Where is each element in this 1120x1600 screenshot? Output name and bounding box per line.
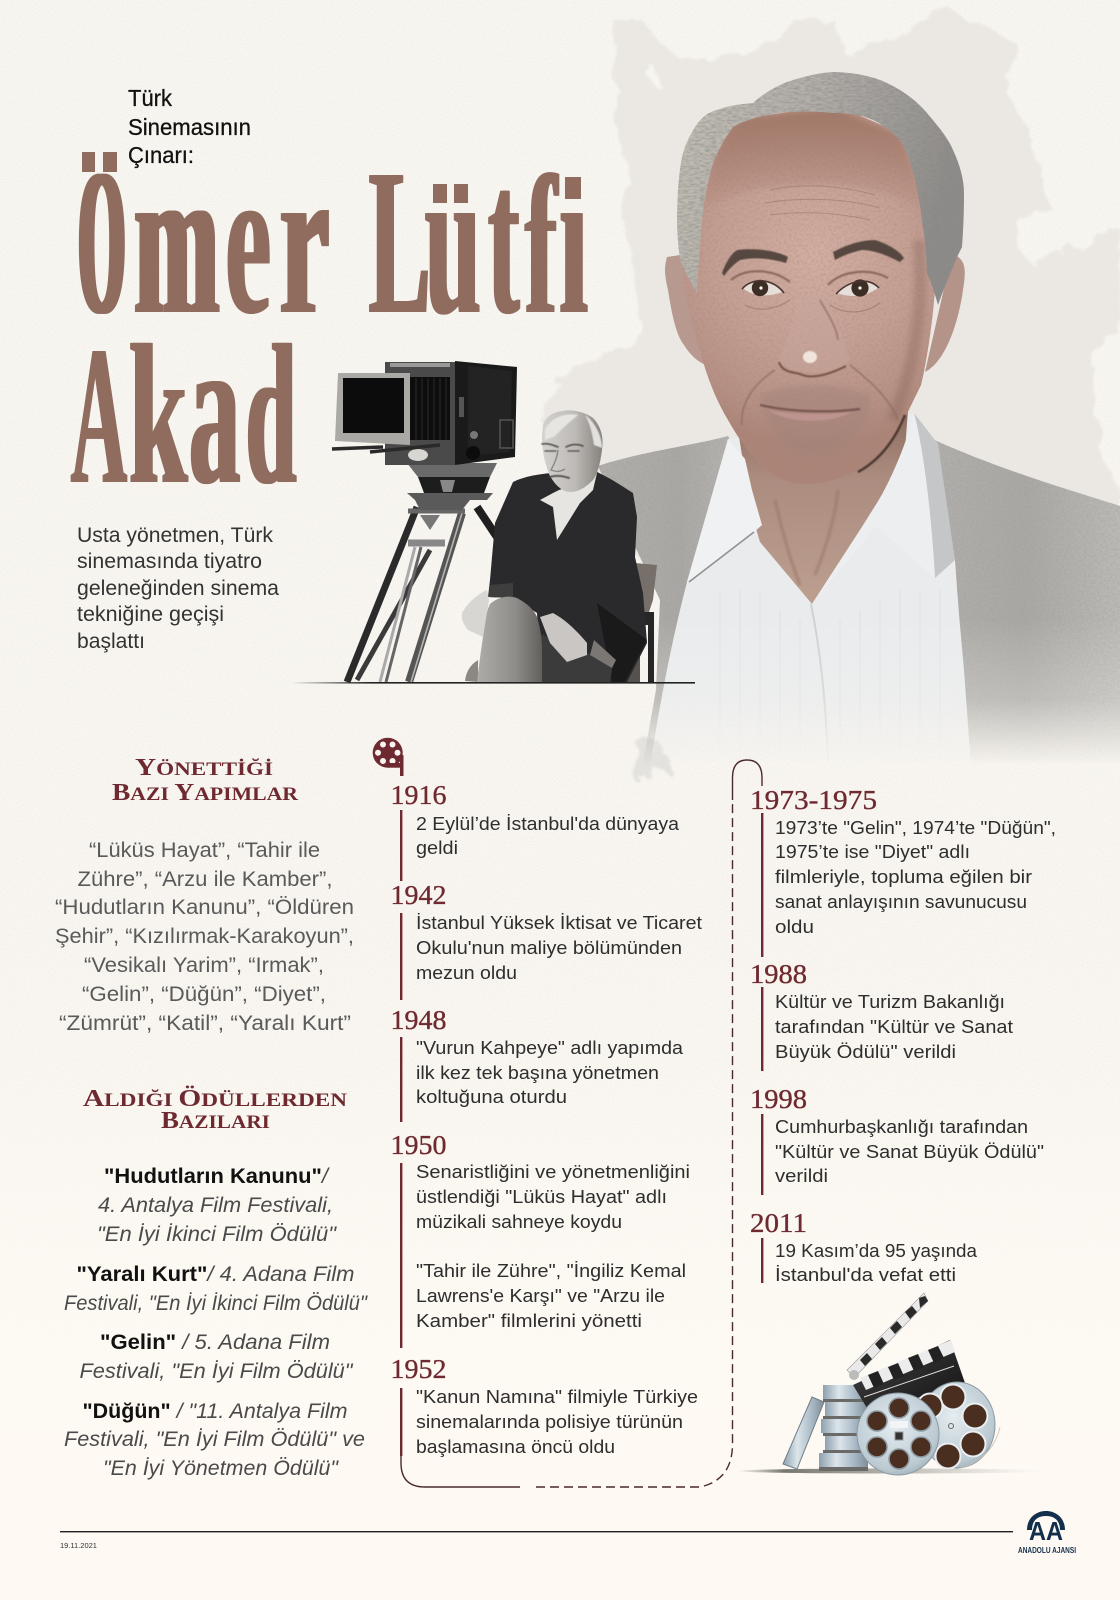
shirt collar xyxy=(540,473,597,540)
timeline: 1942: mezun oldu xyxy=(416,962,517,983)
heading: awards xyxy=(83,1086,347,1134)
list of films: “Vesikalı Yarim”, “Irmak”, xyxy=(84,954,324,977)
neck xyxy=(738,410,908,604)
eyebrows xyxy=(722,240,904,276)
timeline connector line xyxy=(401,760,762,1487)
timeline: 1988: 1988 xyxy=(750,958,807,989)
timeline: 1950: müzikali sahneye koydu xyxy=(416,1211,622,1232)
front reel xyxy=(857,1393,939,1475)
timeline: 1988: Kültür ve Turizm Bakanlığı xyxy=(775,991,1005,1012)
timeline: 2011 xyxy=(750,1207,978,1285)
list of awards xyxy=(64,1165,368,1480)
list of awards: "Düğün" / "11. Antalya Film xyxy=(82,1400,348,1423)
lens board xyxy=(335,373,410,445)
timeline: 1998: "Kültür ve Sanat Büyük Ödülü" xyxy=(775,1141,1044,1162)
mouth xyxy=(760,405,860,421)
face xyxy=(682,105,935,484)
title: name: ü xyxy=(425,121,481,359)
timeline: 1948: ilk kez tek başına yönetmen xyxy=(416,1062,659,1083)
title intro: Sinemasının xyxy=(128,114,251,140)
title: name: k xyxy=(129,304,187,526)
heading: selected works xyxy=(112,755,298,806)
logo: Anadolu Ajansı xyxy=(1018,1511,1076,1555)
paper grain xyxy=(0,0,1120,1146)
title intro: Türk xyxy=(128,85,172,111)
list of films xyxy=(55,839,354,1035)
timeline: 1952 xyxy=(390,1353,698,1457)
title: name: L xyxy=(369,127,430,358)
timeline: 1998 xyxy=(750,1083,1044,1186)
sweater xyxy=(488,472,647,682)
list of awards: "Hudutların Kanunu" / xyxy=(104,1165,330,1188)
camera body xyxy=(385,362,455,465)
timeline: 1950: üstlendiği "Lüküs Hayat" adlı xyxy=(416,1186,667,1207)
title: name: a xyxy=(189,291,240,529)
logo: Anadolu Ajansı: AA xyxy=(1029,1516,1063,1546)
camera on tripod xyxy=(332,361,517,682)
heading: awards: BAZILARI xyxy=(161,1108,270,1134)
timeline: 1950: 1950 xyxy=(390,1129,446,1160)
timeline: 1916 xyxy=(390,779,680,858)
title: name: t xyxy=(488,121,519,359)
timeline: 1952: başlamasına öncü oldu xyxy=(416,1436,615,1457)
timeline: 1942: İstanbul Yüksek İktisat ve Ticaret xyxy=(416,912,702,933)
leaning can xyxy=(783,1397,824,1469)
timeline: 1998: 1998 xyxy=(750,1083,807,1114)
timeline: 1942 xyxy=(390,879,702,983)
intro description xyxy=(77,524,279,653)
title: name: f xyxy=(525,136,557,356)
icon: film reel xyxy=(373,738,404,776)
timeline: 1952: sinemalarında polisiye türünün xyxy=(416,1411,683,1432)
title: name xyxy=(70,121,588,529)
list of awards: Festivali, "En İyi Film Ödülü" xyxy=(80,1360,354,1383)
can stack xyxy=(819,1385,868,1467)
timeline: 1950 xyxy=(390,1129,690,1331)
heading: selected works: BAZI YAPIMLAR xyxy=(112,780,298,806)
legs xyxy=(538,633,613,682)
list of films: Zühre”, “Arzu ile Kamber”, xyxy=(78,868,332,891)
nose xyxy=(742,295,898,425)
title: name: d xyxy=(246,304,296,526)
timeline: 1916: 1916 xyxy=(390,779,446,810)
title: name: A xyxy=(71,306,127,526)
title: name: r xyxy=(280,121,329,359)
list of awards: Festivali, "En İyi Film Ödülü" ve xyxy=(64,1428,365,1451)
timeline: 1998: verildi xyxy=(775,1165,828,1186)
foot xyxy=(465,660,478,682)
timeline: 1998: Cumhurbaşkanlığı tarafından xyxy=(775,1116,1028,1137)
list of films: “Gelin”, “Düğün”, “Diyet”, xyxy=(82,983,326,1006)
title intro: Çınarı: xyxy=(128,142,194,168)
heading: awards: ALDIĞI ÖDÜLLERDEN xyxy=(83,1086,347,1112)
timeline: 1973-1975: 1973’te "Gelin", 1974’te "Düğün", xyxy=(775,817,1056,838)
clapper board xyxy=(853,1340,965,1413)
head xyxy=(542,410,603,492)
clapper stick xyxy=(847,1293,928,1378)
list of awards: Festivali, "En İyi İkinci Film Ödülü" xyxy=(64,1292,368,1315)
title: name: m xyxy=(135,121,219,359)
timeline: 1973-1975: oldu xyxy=(775,916,814,937)
timeline: 1988: Büyük Ödülü" verildi xyxy=(775,1041,956,1062)
list of films: “Zümrüt”, “Katil”, “Yaralı Kurt” xyxy=(59,1012,351,1035)
chair xyxy=(635,563,657,615)
timeline: 1916: geldi xyxy=(416,837,458,858)
hands xyxy=(462,590,489,637)
timeline: 1942: 1942 xyxy=(390,879,446,910)
heading: selected works: YÖNETTİĞİ xyxy=(135,755,273,781)
list of films: “Hudutların Kanunu”, “Öldüren xyxy=(55,896,354,919)
timeline: 1950: Lawrens'e Karşı" ve "Arzu ile xyxy=(416,1285,665,1306)
timeline: 2011: 2011 xyxy=(750,1207,807,1238)
shadow xyxy=(737,1468,1047,1474)
eyes xyxy=(731,271,888,312)
timeline: 1973-1975: 1973-1975 xyxy=(750,784,877,815)
timeline: 1942: Okulu'nun maliye bölümünden xyxy=(416,937,682,958)
timeline: 2011: 19 Kasım’da 95 yaşında xyxy=(775,1240,978,1261)
ink stain behind portrait xyxy=(540,7,1120,782)
list of films: “Lüküs Hayat”, “Tahir ile xyxy=(89,839,320,862)
tripod head xyxy=(407,493,493,510)
list of awards: "Gelin" / 5. Adana Film xyxy=(100,1331,330,1354)
illustration: clapperboard and film reels xyxy=(737,1293,1047,1475)
ground line xyxy=(291,682,695,684)
timeline: 1950: "Tahir ile Zühre", "İngiliz Kemal xyxy=(416,1260,686,1281)
back reel xyxy=(919,1382,995,1468)
list of awards: "En İyi Yönetmen Ödülü" xyxy=(103,1457,340,1480)
timeline: 1952: 1952 xyxy=(390,1353,446,1384)
intro description: Usta yönetmen, Türk xyxy=(77,524,273,547)
date: 19.11.2021 xyxy=(60,1541,97,1550)
seated man photo xyxy=(462,410,657,682)
timeline bars xyxy=(400,810,763,1456)
timeline: 1973-1975 xyxy=(750,784,1056,937)
timeline: 1950: Senaristliğini ve yönetmenliğini xyxy=(416,1161,690,1182)
hair xyxy=(677,72,964,305)
list of awards: "En İyi İkinci Film Ödülü" xyxy=(97,1223,338,1246)
footer rule xyxy=(60,1531,1013,1532)
timeline: 1948 xyxy=(390,1004,684,1107)
shirt xyxy=(648,413,972,780)
jacket xyxy=(598,436,1120,780)
ears xyxy=(665,255,706,365)
timeline: 1948: koltuğuna oturdu xyxy=(416,1086,567,1107)
list of films: Şehir”, “Kızılırmak-Karakoyun”, xyxy=(55,925,354,948)
list of awards: 4. Antalya Film Festivali, xyxy=(98,1194,333,1217)
forehead wrinkles xyxy=(765,186,880,220)
timeline: 1973-1975: 1975’te ise "Diyet" adlı xyxy=(775,841,970,862)
timeline: 1988 xyxy=(750,958,1013,1062)
timeline: 1973-1975: filmleriyle, topluma eğilen bir xyxy=(775,866,1032,887)
timeline: 1916: 2 Eylül’de İstanbul'da dünyaya xyxy=(416,813,680,834)
intro description: tekniğine geçişi xyxy=(77,603,224,626)
main portrait photo xyxy=(598,72,1120,780)
timeline: 1973-1975: sanat anlayışının savunucusu xyxy=(775,891,1027,912)
timeline: 2011: İstanbul'da vefat etti xyxy=(775,1264,956,1285)
collars xyxy=(687,439,762,582)
title: name: e xyxy=(225,121,271,359)
logo: Anadolu Ajansı: ANADOLU AJANSI xyxy=(1018,1546,1076,1555)
title: name: Ö xyxy=(79,127,125,358)
intro description: başlattı xyxy=(77,630,145,653)
intro description: geleneğinden sinema xyxy=(77,577,279,600)
list of awards: "Yaralı Kurt" / 4. Adana Film xyxy=(76,1263,354,1286)
title intro xyxy=(128,85,251,168)
timeline: 1950: Kamber" filmlerini yönetti xyxy=(416,1310,642,1331)
timeline: 1988: tarafından "Kültür ve Sanat xyxy=(775,1016,1013,1037)
tripod xyxy=(347,507,497,682)
title: name: i xyxy=(560,121,587,359)
timeline: 1948: 1948 xyxy=(390,1004,446,1035)
timeline: 1948: "Vurun Kahpeye" adlı yapımda xyxy=(416,1037,684,1058)
timeline: 1952: "Kanun Namına" filmiyle Türkiye xyxy=(416,1386,698,1407)
intro description: sinemasında tiyatro xyxy=(77,550,262,573)
